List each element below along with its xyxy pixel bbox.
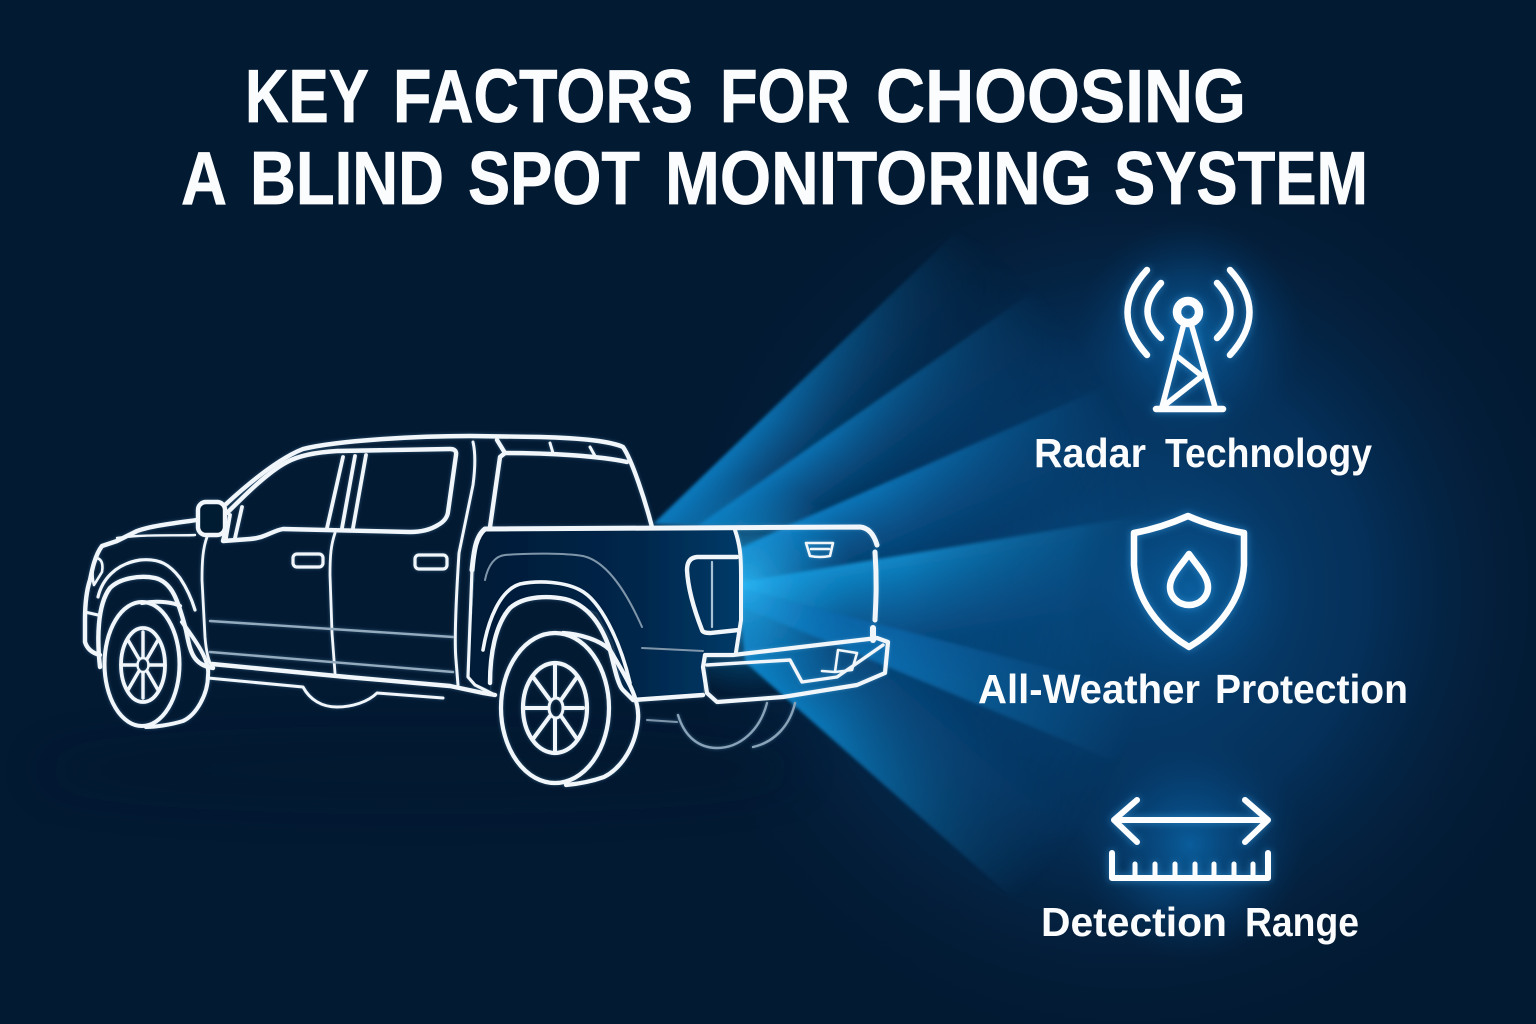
tailgate edges and handle (735, 530, 741, 652)
front fender arches (98, 560, 195, 610)
title: FACTORS (393, 54, 693, 138)
label: detection range: Range (1245, 899, 1359, 945)
cab pillars and doors (202, 537, 212, 667)
label: radar technology (1034, 430, 1372, 476)
door handles (293, 554, 323, 567)
body creases (210, 621, 453, 672)
rear wheel (501, 633, 638, 785)
title: SYSTEM (1114, 136, 1368, 220)
title (181, 54, 1368, 220)
icon: radar tower (1128, 270, 1250, 409)
front wheel (104, 602, 208, 727)
hood and nose (85, 520, 197, 655)
title: MONITORING (665, 136, 1092, 220)
title: FOR (720, 54, 850, 138)
truck bed rail and tailgate top (472, 527, 877, 570)
label: detection range (1041, 899, 1359, 945)
title: CHOOSING (876, 54, 1246, 138)
rear fender arches (483, 582, 630, 683)
window pillars (226, 455, 366, 538)
label: radar technology: Technology (1165, 430, 1372, 476)
far side wheels, faint (678, 703, 795, 748)
title: A (181, 136, 227, 220)
rear bumper (703, 638, 888, 702)
detection range item (1041, 800, 1359, 945)
title: KEY (245, 54, 369, 138)
label: detection range: Detection (1041, 899, 1227, 945)
icon glows (1065, 220, 1315, 960)
faint bed crease lines (485, 554, 703, 722)
title: SPOT (468, 136, 640, 220)
radar technology item (1034, 270, 1372, 476)
label: all-weather protection (978, 666, 1408, 712)
label: all-weather protection: All-Weather (978, 666, 1200, 712)
side window frame (223, 449, 456, 541)
mirror (198, 502, 225, 535)
icon: range arrow and ruler (1112, 800, 1268, 878)
sensor light beams (653, 247, 1120, 886)
all-weather protection item (978, 516, 1408, 712)
title: BLIND (250, 136, 444, 220)
truck bed body fill (468, 528, 741, 700)
rocker panel (212, 664, 495, 695)
icon: shield with water drop (1134, 516, 1244, 647)
roof and windshield (225, 436, 652, 527)
pickup truck outline (85, 436, 888, 785)
tail light (687, 557, 738, 633)
label: radar technology: Radar (1034, 430, 1146, 476)
label: all-weather protection: Protection (1215, 666, 1408, 712)
